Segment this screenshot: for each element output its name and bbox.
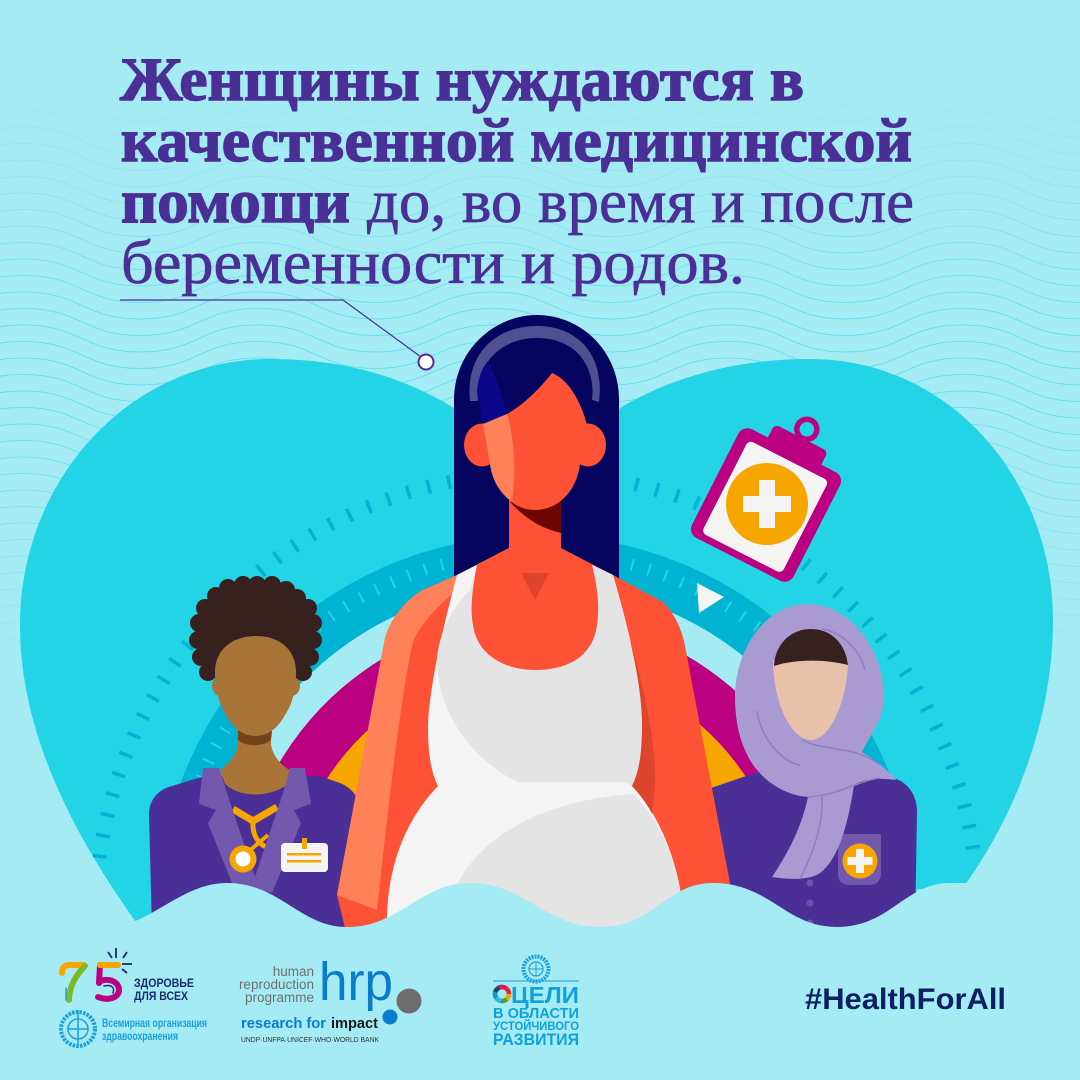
logo text: [134, 976, 194, 1003]
neck shadow: [238, 731, 272, 745]
hijab fold lines: [757, 629, 880, 879]
face: [773, 660, 848, 740]
dots: [382, 988, 422, 1024]
WHO name: здравоохранения: [102, 1029, 178, 1043]
name badge: [281, 838, 328, 872]
SDG text: УСТОЙЧИВОГО: [493, 1018, 579, 1033]
neck triangle: [521, 573, 549, 600]
neck shadow: [510, 500, 561, 533]
white tank top: [387, 565, 681, 932]
programme name: human: [273, 964, 314, 979]
research for impact: impact: [331, 1016, 378, 1032]
blue hair lock: [477, 361, 507, 424]
title: качественной медицинской: [121, 108, 912, 175]
sun rays: [108, 948, 132, 973]
tank top shadow: [437, 565, 642, 786]
purple jacket: [705, 772, 917, 930]
afro hair: [189, 576, 322, 682]
arc: magenta: [238, 616, 836, 930]
face: [215, 636, 296, 736]
icon: medical clipboard: [688, 394, 860, 585]
face highlight: [483, 414, 514, 501]
chest scoop neckline: [472, 548, 598, 670]
SDG text: РАЗВИТИЯ: [493, 1031, 579, 1049]
SDG wheel: [495, 987, 509, 1001]
WHO emblem: [61, 1010, 95, 1047]
ring tick marks: [177, 552, 897, 880]
programme name: reproduction: [239, 977, 314, 992]
logo text: ЗДОРОВЬЕ: [134, 976, 194, 990]
logo: WHO 75 health for all: [61, 948, 207, 1047]
long hair: [454, 315, 619, 582]
hijab: [735, 604, 896, 879]
arm highlight: [337, 548, 509, 910]
title: помощи: [121, 169, 350, 236]
logo: sustainable development goals: [493, 956, 579, 1049]
title: до, во время и после: [367, 169, 914, 236]
WHO name: Всемирная организация: [102, 1016, 207, 1030]
heart shape: [20, 359, 1053, 925]
arc: dark teal ring: [157, 535, 917, 930]
outer tick marks: [100, 473, 974, 858]
sponsors: UNDP·UNFPA·UNICEF·WHO·WORLD BANK: [241, 1035, 379, 1044]
purple jacket: [149, 776, 356, 930]
lapels: [199, 768, 311, 893]
logo text: ДЛЯ ВСЕХ: [134, 989, 188, 1003]
SDG text: ЦЕЛИ: [511, 982, 579, 1008]
logo: HRP: [239, 952, 422, 1044]
stethoscope chest piece: [230, 846, 256, 872]
title: Женщины нуждаются в: [120, 47, 804, 114]
ears: [464, 424, 606, 466]
programme name: programme: [245, 990, 314, 1005]
title: [120, 47, 914, 297]
bottom wave band: [0, 883, 1080, 1080]
UN emblem: [524, 956, 548, 982]
belly shadow: [455, 794, 681, 932]
title: беременности и родов.: [121, 230, 745, 297]
programme name: [239, 964, 314, 1005]
hrp wordmark: hrp: [319, 952, 393, 1012]
five numeral: [98, 965, 119, 999]
jacket buttons: [806, 880, 814, 926]
hashtag: #HealthForAll: [805, 983, 1006, 1016]
divider: [493, 980, 579, 982]
concentric rainbow arcs: [157, 535, 917, 930]
hair: [774, 629, 848, 666]
callout leader line: [120, 300, 434, 370]
figure: right woman in hijab: [705, 604, 917, 930]
neck and chest: [220, 725, 290, 794]
arc: yellow: [287, 664, 787, 930]
WHO name: [102, 1016, 207, 1043]
pocket with medical badge: [838, 834, 881, 885]
background wave lines: [0, 95, 1080, 649]
SDG text: В ОБЛАСТИ: [493, 1005, 579, 1022]
SDG text: [493, 982, 579, 1049]
arc: light band: [207, 584, 867, 930]
research for impact: research for: [241, 1016, 326, 1032]
headband highlight: [469, 326, 600, 402]
neck: [509, 495, 561, 555]
research for impact: [241, 1016, 378, 1032]
seven numeral: [62, 965, 85, 1000]
side shadow: [630, 640, 655, 814]
stethoscope: [233, 807, 277, 852]
white play triangle: [697, 583, 724, 613]
figure: left woman doctor: [149, 576, 356, 930]
face: [482, 373, 587, 510]
figure: central pregnant woman: [337, 315, 730, 932]
body: [337, 548, 730, 932]
ears: [212, 675, 300, 697]
